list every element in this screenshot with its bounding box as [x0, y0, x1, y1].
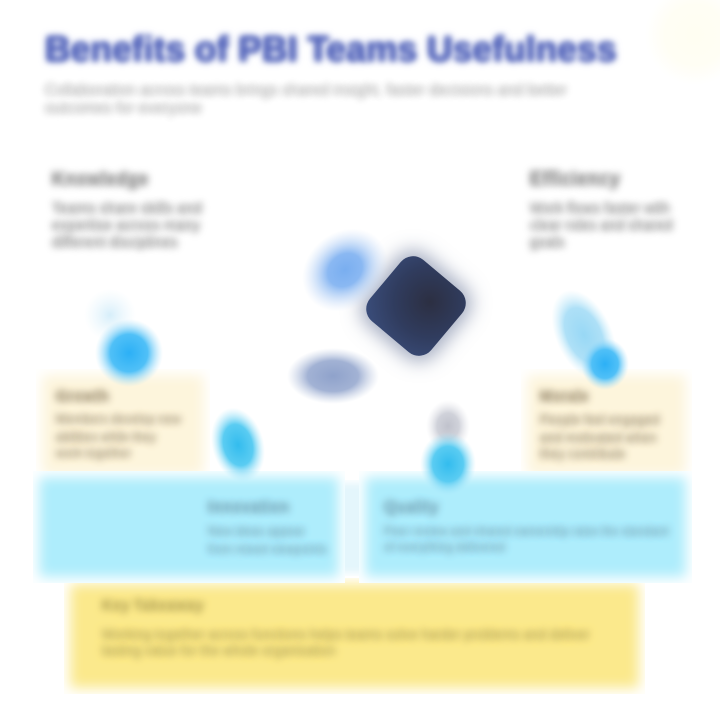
panel text: cream left: [52, 386, 184, 464]
panel: cream left: [36, 369, 210, 481]
panel: cream right: [521, 369, 692, 481]
gap tint between cyan panels: [326, 480, 374, 576]
text block: top right benefit: [526, 166, 676, 254]
decorative corner tint: [645, 0, 720, 85]
panel text: cyan right: [380, 496, 671, 556]
icon: capsule lower left: [203, 402, 273, 488]
icon: light blue speech shape: [285, 211, 405, 329]
icon: blue capsule right: [538, 280, 630, 390]
text block: top left benefit: [48, 168, 206, 253]
panel: yellow summary: [64, 578, 645, 694]
icon: blue-grey ellipse: [287, 348, 379, 404]
panel text: cyan left: [204, 498, 328, 558]
panel text: cream right: [536, 386, 664, 464]
icon: dark diamond: [360, 250, 472, 362]
panel text: yellow summary: [98, 596, 591, 661]
central illustration: [285, 211, 405, 404]
panel: cyan left: [33, 471, 345, 583]
icon: bottle lower right: [420, 400, 476, 496]
panel: cyan right: [359, 471, 692, 583]
icon: blue circle left: [84, 289, 163, 387]
subtitle: [42, 81, 568, 118]
